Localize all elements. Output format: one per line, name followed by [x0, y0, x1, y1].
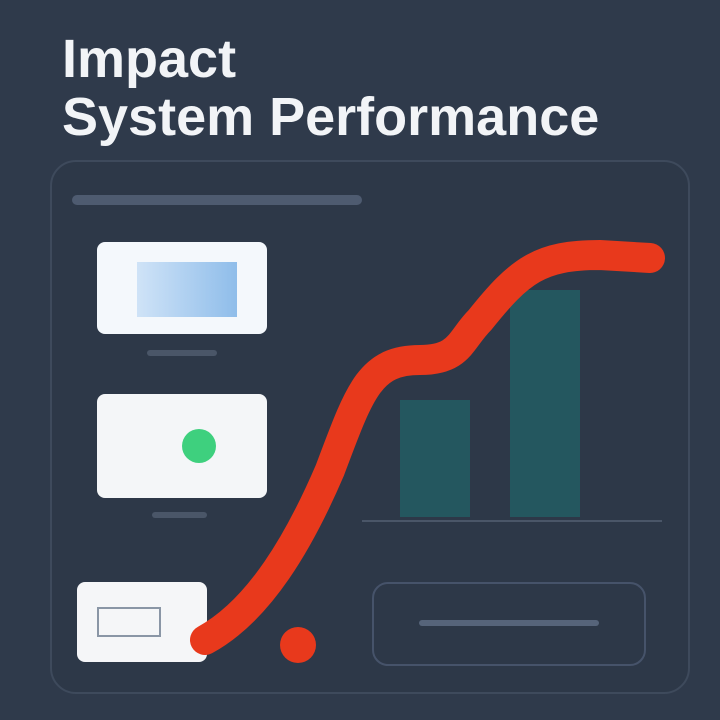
card: small grid card: [77, 582, 207, 662]
subtitle text: [72, 195, 362, 205]
bar 2: [510, 290, 580, 517]
title: Impact: [62, 29, 236, 89]
card: blue chart card: [97, 242, 267, 334]
bottom legend box: [372, 582, 646, 666]
trend line: [205, 255, 650, 663]
panel: main chart panel: [50, 160, 690, 694]
title: System Performance: [62, 87, 599, 147]
card label: [147, 350, 217, 356]
title: [62, 29, 599, 147]
card: status card with green dot: [97, 394, 267, 498]
card label: [152, 512, 207, 518]
bar 1: [400, 400, 470, 517]
baseline: [362, 520, 662, 522]
